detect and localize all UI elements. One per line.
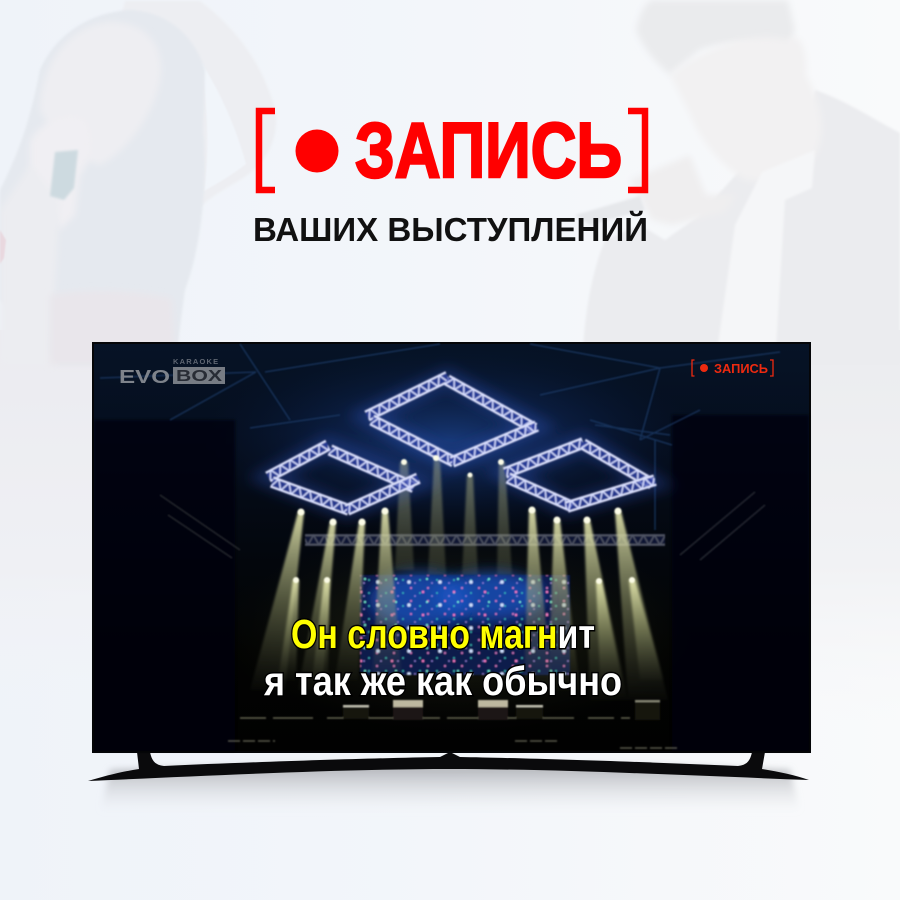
TV stand (88, 752, 809, 781)
TV frame (92, 342, 811, 753)
cross truss (305, 534, 665, 546)
stage haze (220, 530, 700, 730)
light beams (250, 510, 668, 700)
right bracket (628, 111, 645, 190)
truss: left rig (265, 440, 421, 516)
heading word: ЗАПИСЬ (355, 106, 622, 194)
karaoke lyrics (263, 611, 622, 704)
logo: EVOBOX karaoke: BOX (176, 368, 222, 385)
subtitle: ВАШИХ ВЫСТУПЛЕНИЙ (253, 210, 648, 248)
left bracket (259, 111, 275, 190)
logo: EVOBOX karaoke (119, 357, 225, 387)
record indicator: ЗАПИСЬ (714, 361, 768, 376)
microphone (50, 150, 78, 200)
spot lamps (293, 455, 635, 584)
side curtains (94, 415, 809, 751)
ceiling beams (100, 344, 780, 530)
logo: EVOBOX karaoke: EVO (119, 367, 170, 387)
photo: singing man, faded (575, 0, 900, 720)
record indicator (692, 360, 773, 376)
logo: EVOBOX karaoke: KARAOKE (173, 357, 219, 366)
lyric line 2: я так же как обычно (263, 658, 622, 704)
LED wall (360, 572, 570, 675)
escalator truss right (680, 492, 765, 560)
photo: singing woman, faded (0, 1, 276, 720)
truss rigs (265, 371, 657, 516)
title: record badge (259, 106, 645, 194)
stage equipment (228, 700, 680, 748)
truss: centre rig (364, 371, 539, 468)
floor shadow under TV (100, 764, 800, 812)
body fading beside the TV (0, 330, 92, 720)
truss: right rig (503, 437, 657, 513)
TV screen: concert scene (94, 344, 809, 751)
record dot (296, 130, 338, 172)
ceiling glow (200, 345, 700, 535)
upper beams (395, 458, 512, 575)
jacket fading beside the TV (811, 330, 900, 720)
lyric line 1: Он словно магнит (291, 611, 595, 657)
escalator truss left (160, 495, 240, 558)
rig glow (268, 378, 653, 510)
